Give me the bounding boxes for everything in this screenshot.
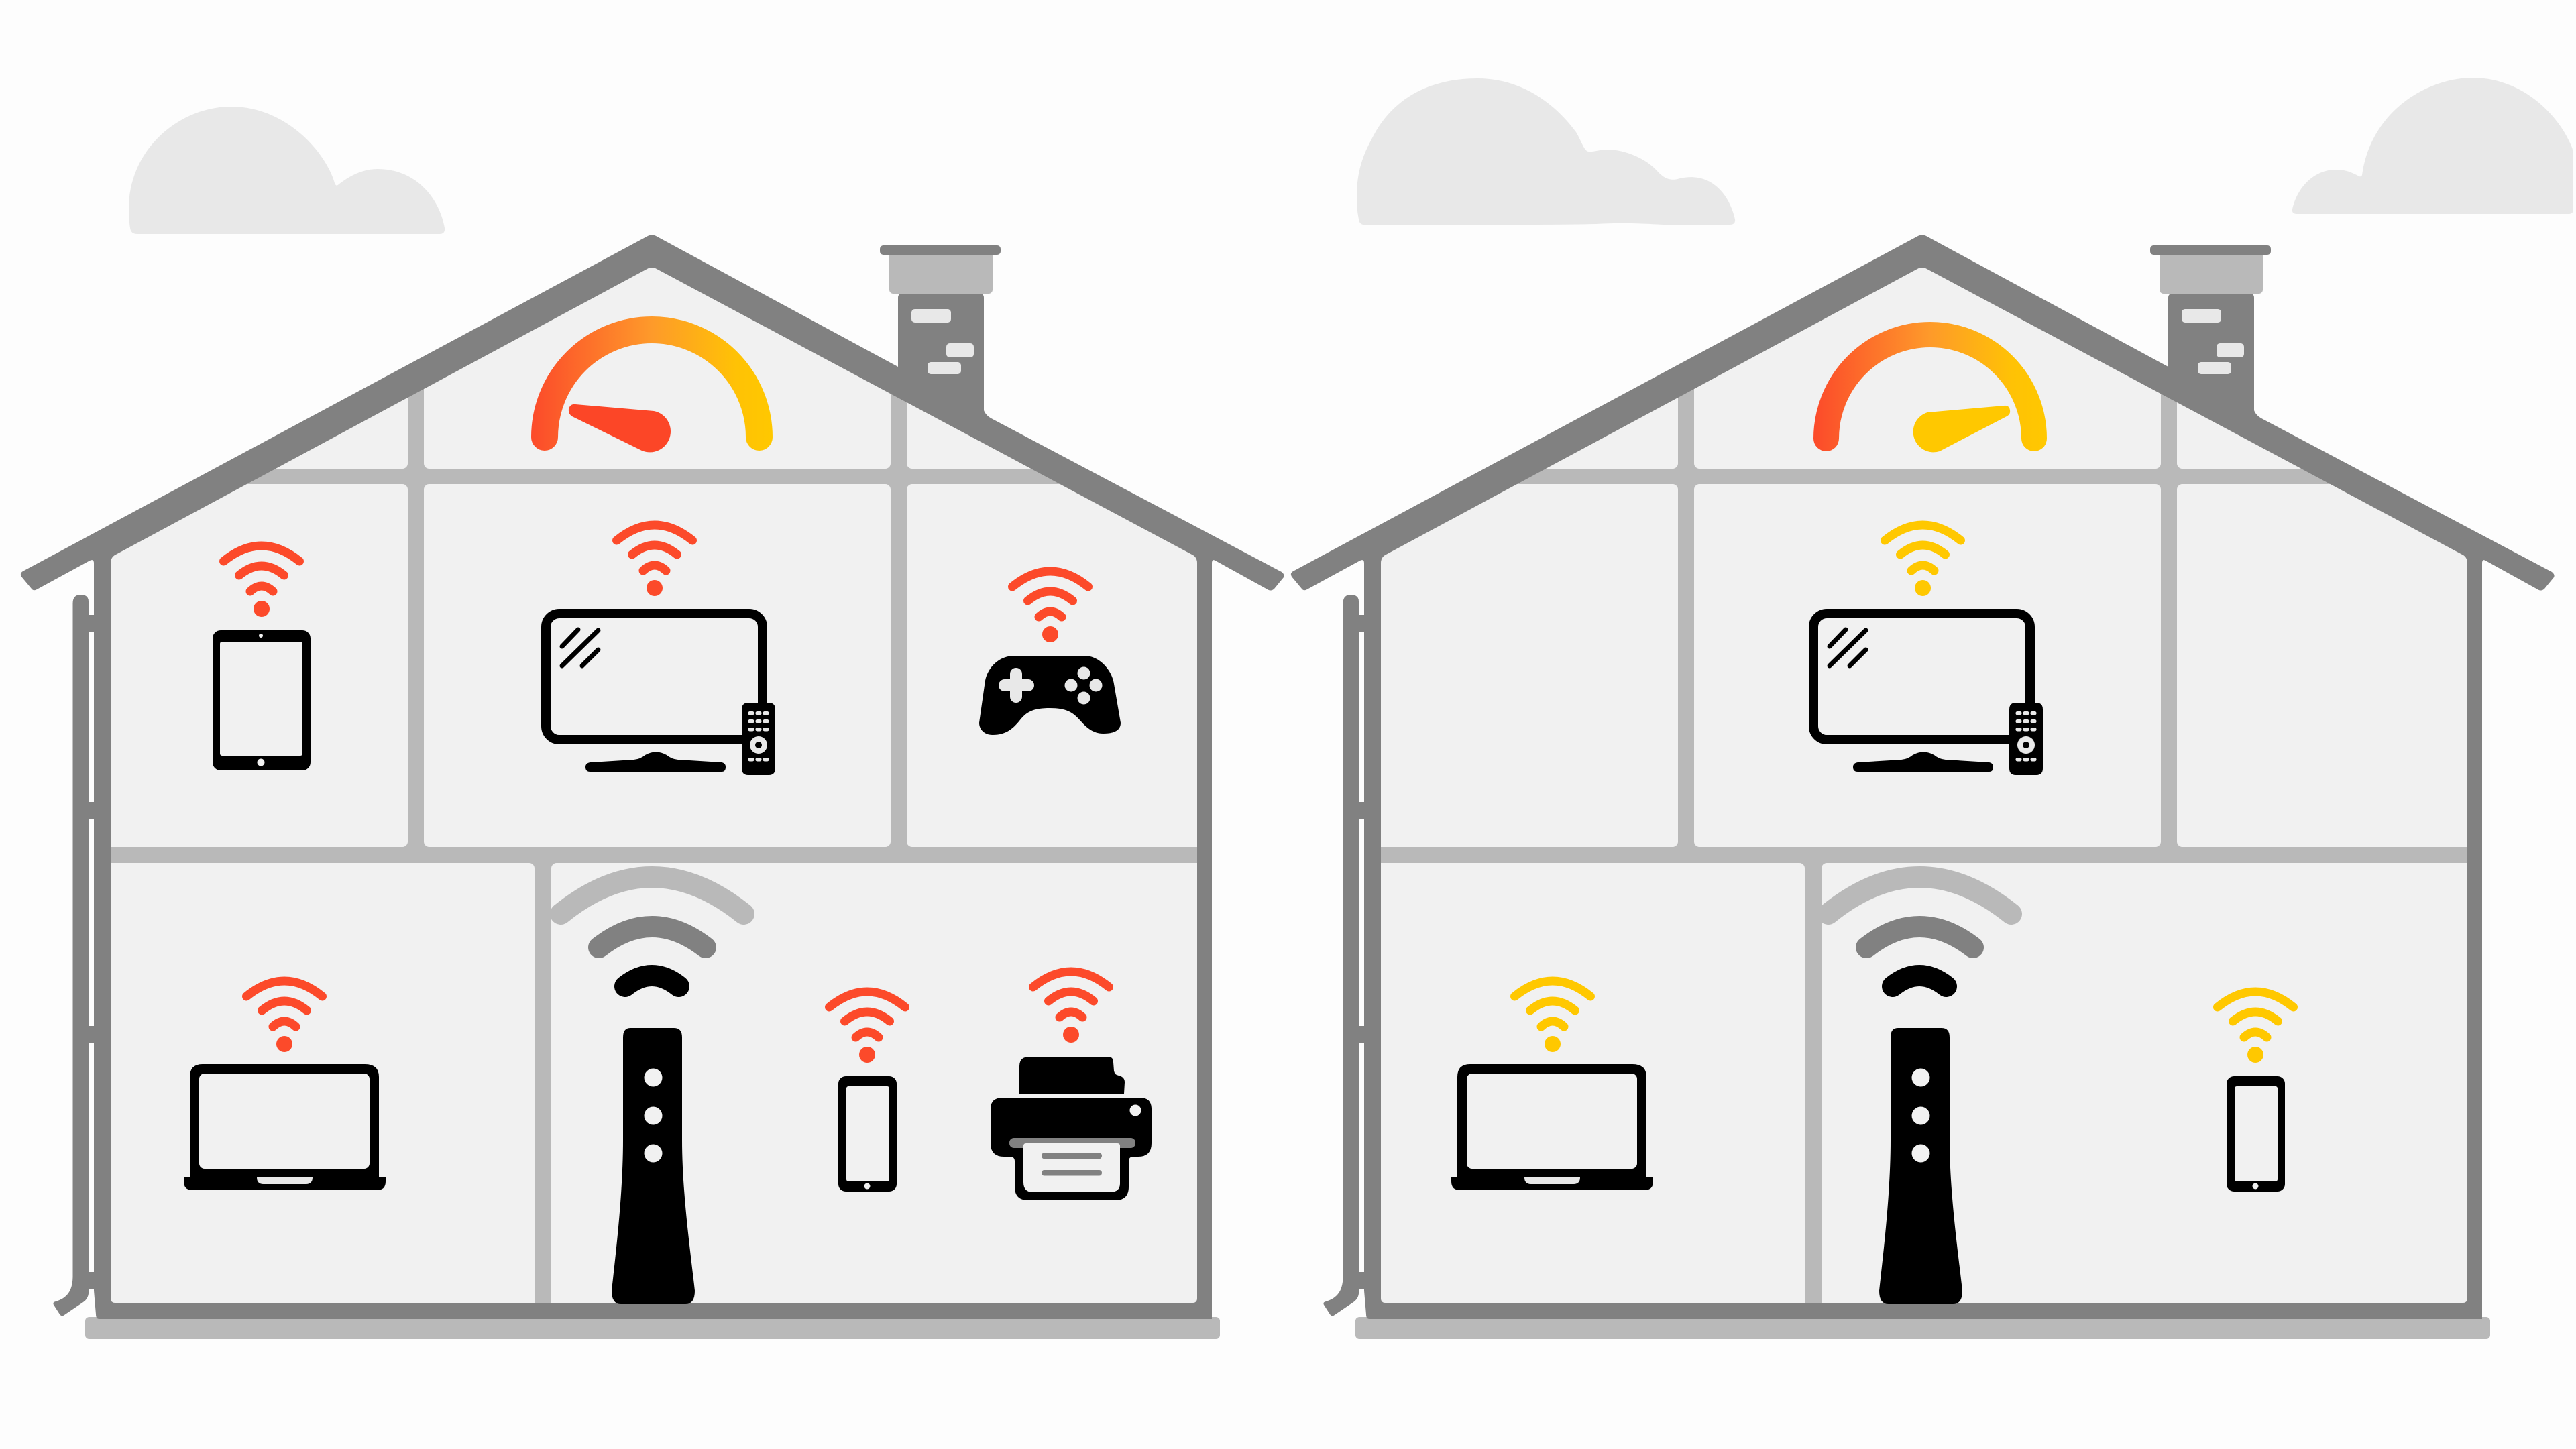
cloud: centre: [1357, 78, 1735, 225]
panel: right house (fast, uncongested network): [1291, 235, 2555, 1339]
house structure: walls, roof, chimney, rooms: [21, 235, 1284, 1339]
device: router with signal arcs: [561, 877, 744, 1304]
speed gauge: slow: [545, 330, 759, 452]
device: laptop: [1451, 1064, 1653, 1190]
device: laptop: [184, 1064, 386, 1190]
cloud: right: [2292, 78, 2573, 214]
device: smartphone: [2227, 1076, 2285, 1192]
wifi signal: laptop: [247, 981, 322, 1052]
wifi signal: television: [1885, 525, 1961, 596]
device: printer: [991, 1057, 1152, 1200]
device: television and remote: [546, 614, 775, 775]
wifi signal: printer: [1033, 972, 1109, 1043]
device: router with signal arcs: [1828, 877, 2011, 1304]
device: smartphone: [838, 1076, 897, 1192]
wifi signal: tablet: [224, 546, 299, 617]
wifi signal: laptop: [1514, 981, 1591, 1052]
device: game controller: [979, 656, 1121, 735]
speed gauge: fast: [1826, 335, 2034, 452]
wifi signal: game controller: [1013, 571, 1088, 642]
house structure: walls, roof, chimney, rooms: [1291, 235, 2555, 1339]
wifi signal: television: [617, 525, 692, 596]
device: tablet: [213, 630, 311, 770]
wifi signal: smartphone: [2217, 992, 2294, 1063]
cloud: left: [129, 107, 445, 234]
device: television and remote: [1813, 614, 2043, 775]
panel: left house (slow, congested network): [21, 235, 1284, 1339]
wifi signal: smartphone: [829, 992, 905, 1063]
